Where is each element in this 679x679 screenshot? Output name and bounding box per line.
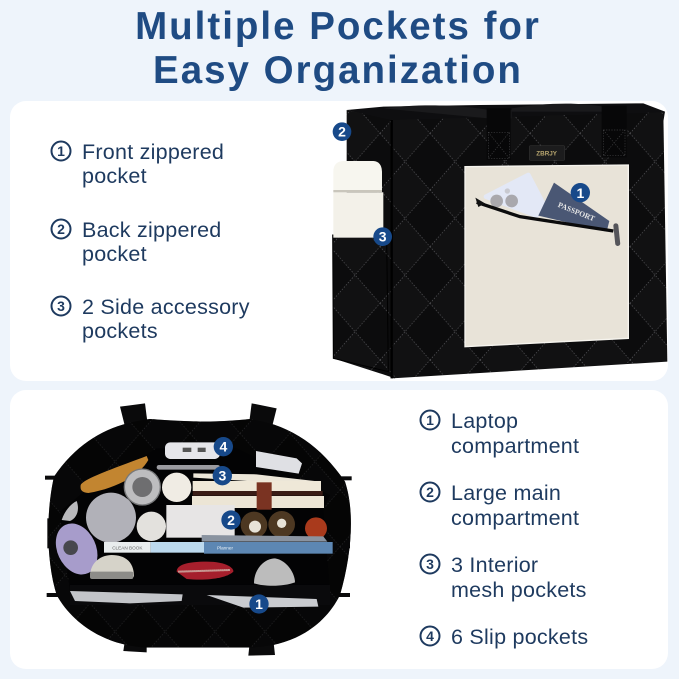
item: laptop compartment — [420, 409, 579, 458]
red pouch — [177, 562, 233, 580]
round mirror — [124, 469, 160, 505]
passport — [538, 183, 609, 232]
tablet — [202, 535, 327, 542]
legend: outside pockets — [52, 140, 250, 343]
item: large main compartment: compartment — [451, 506, 579, 530]
item: back zippered pocket: 2 — [57, 221, 65, 237]
item: back zippered pocket: pocket — [82, 242, 147, 266]
item: front zippered pocket — [52, 140, 224, 188]
zipper — [475, 198, 620, 246]
handles — [383, 104, 627, 160]
white case — [256, 451, 302, 474]
badge 2: 2 — [338, 124, 346, 140]
orange pouch — [81, 456, 148, 493]
photo: tote bag exterior — [333, 103, 667, 378]
item: side accessory pockets: 2 Side accessory — [82, 295, 250, 319]
badge 1: 1 — [255, 596, 263, 612]
badge 1 — [571, 183, 590, 202]
badge 1: 1 — [576, 185, 584, 201]
badge 3: 3 — [218, 468, 226, 484]
badge 2: 2 — [227, 512, 235, 528]
item: front zippered pocket: Front zippered — [82, 140, 224, 164]
badge 3: 3 — [379, 229, 387, 245]
item: interior mesh pockets: 3 Interior — [451, 553, 538, 577]
badge 4: 4 — [219, 439, 227, 455]
fan — [90, 555, 134, 579]
bag side — [333, 110, 395, 378]
title — [135, 5, 541, 92]
power bank — [165, 442, 220, 459]
badge 3 — [213, 466, 232, 485]
item: front zippered pocket: 1 — [57, 143, 65, 159]
passport: PASSPORT — [557, 200, 596, 223]
title: Easy Organization — [153, 49, 523, 92]
badge 2 — [333, 122, 351, 141]
bag top edge — [347, 103, 665, 122]
item: laptop compartment: 1 — [426, 412, 434, 428]
phone — [486, 175, 544, 216]
item: large main compartment — [420, 481, 579, 530]
side pocket opening — [333, 235, 388, 372]
side tabs — [45, 476, 352, 597]
badge 2 — [221, 510, 241, 530]
bag body — [43, 415, 357, 652]
pen — [157, 465, 220, 470]
item: interior mesh pockets — [420, 553, 587, 602]
item: large main compartment: 2 — [426, 484, 434, 500]
badge 3 — [373, 227, 392, 246]
panel: inside pockets — [10, 390, 668, 669]
item: side accessory pockets: 3 — [57, 298, 65, 314]
brand tag — [529, 146, 565, 160]
laptop — [70, 591, 318, 608]
notebooks — [192, 473, 324, 510]
blue book: Planner — [217, 546, 233, 551]
water bottle — [333, 161, 383, 238]
item: back zippered pocket: Back zippered — [82, 218, 222, 242]
item: back zippered pocket — [52, 218, 222, 266]
item: side accessory pockets — [52, 295, 250, 343]
item: front zippered pocket: pocket — [82, 164, 147, 188]
panel: outside pockets — [10, 101, 668, 381]
item: interior mesh pockets: 3 — [426, 556, 434, 572]
mask — [254, 558, 295, 586]
candle — [162, 473, 191, 502]
item: slip pockets: 4 — [426, 628, 434, 644]
handles — [120, 403, 277, 656]
gray jar — [86, 493, 136, 543]
brand tag: ZBRJY — [536, 151, 558, 158]
blue book — [104, 542, 333, 554]
item: interior mesh pockets: mesh pockets — [451, 578, 587, 602]
title: Multiple Pockets for — [135, 5, 541, 48]
beige front panel — [465, 165, 628, 347]
item: large main compartment: Large main — [451, 481, 561, 505]
blue book: CLEAN BOOK — [112, 546, 143, 551]
tea light — [137, 512, 166, 541]
badge 1 — [249, 594, 269, 614]
photo: tote bag interior — [43, 403, 357, 656]
small grey item — [62, 501, 78, 521]
item: side accessory pockets: pockets — [82, 319, 158, 343]
cream zipper — [178, 570, 230, 572]
white box — [166, 505, 235, 538]
badge 4 — [214, 437, 233, 456]
item: laptop compartment: compartment — [451, 434, 579, 458]
legend: inside pockets — [420, 409, 588, 649]
gold balls — [241, 511, 327, 539]
bag front — [392, 112, 667, 378]
item: slip pockets: 6 Slip pockets — [451, 625, 588, 649]
lavender umbrella — [48, 517, 105, 581]
item: laptop compartment: Laptop — [451, 409, 518, 433]
